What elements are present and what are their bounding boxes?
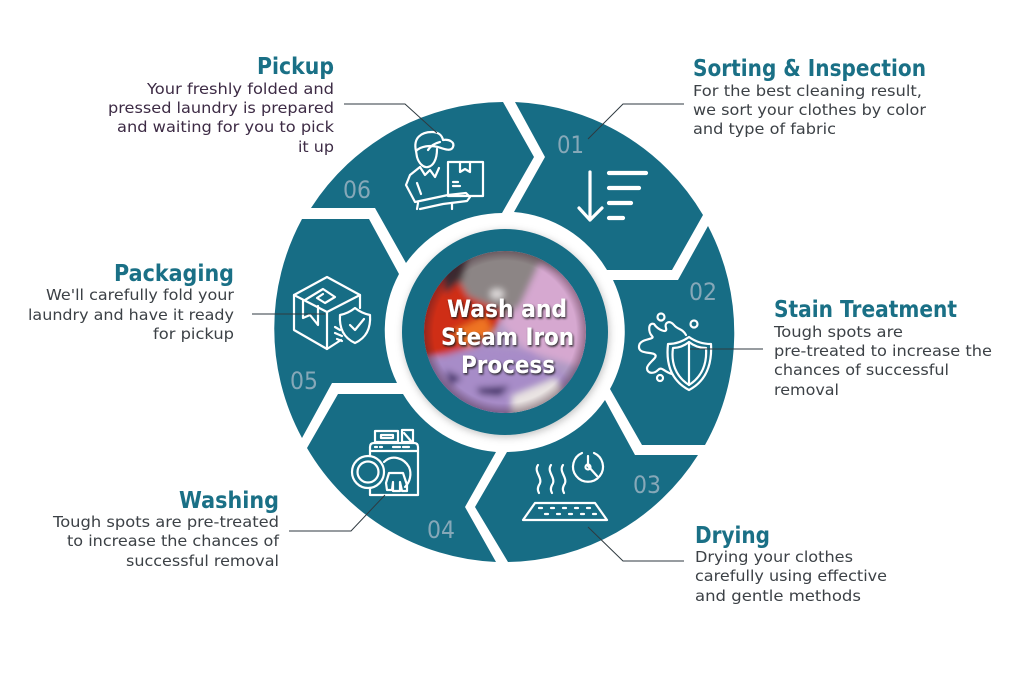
icon: sort arrow and bars bbox=[579, 172, 646, 220]
text block: pickup: Pickup bbox=[257, 54, 334, 80]
step numbers: 01 bbox=[557, 131, 584, 159]
step numbers bbox=[290, 131, 717, 544]
text block: sorting and inspection bbox=[693, 56, 927, 138]
centre teal disc bbox=[402, 229, 608, 435]
text block: pickup bbox=[108, 54, 334, 156]
leader: drying bbox=[588, 527, 684, 561]
text block: sorting and inspection: and type of fabric bbox=[693, 120, 836, 138]
text block: stain treatment: Tough spots are bbox=[773, 323, 903, 341]
step numbers: 04 bbox=[427, 516, 455, 544]
leader: washing bbox=[289, 495, 385, 531]
segment 04: washing bbox=[307, 394, 496, 562]
segment 06: pickup bbox=[311, 102, 534, 263]
text block: washing: to increase the chances of bbox=[67, 532, 280, 550]
segment 01: sorting bbox=[514, 102, 703, 270]
segment 05: packaging bbox=[274, 219, 399, 438]
icon: box with shield bbox=[294, 277, 370, 349]
text block: pickup: Your freshly folded and bbox=[146, 80, 334, 98]
text block: drying: and gentle methods bbox=[695, 587, 861, 605]
centre title: Process bbox=[461, 351, 555, 379]
centre photo bbox=[424, 251, 586, 413]
text block: stain treatment: Stain Treatment bbox=[774, 297, 957, 323]
icon: stain and shield bbox=[639, 314, 711, 390]
step numbers: 02 bbox=[689, 278, 717, 306]
leader: sorting bbox=[588, 104, 684, 139]
leader: packaging bbox=[252, 313, 325, 315]
text block: drying: Drying your clothes bbox=[695, 548, 853, 566]
text block: pickup: and waiting for you to pick bbox=[117, 118, 334, 136]
text block: packaging: laundry and have it ready bbox=[28, 306, 234, 324]
text block: stain treatment: removal bbox=[774, 381, 839, 399]
text block: drying bbox=[695, 523, 887, 605]
text block: stain treatment bbox=[773, 297, 992, 399]
leader: pickup bbox=[344, 104, 437, 133]
text block: washing: successful removal bbox=[126, 552, 279, 570]
text block: packaging: Packaging bbox=[114, 261, 234, 287]
infographic canvas bbox=[30, 56, 992, 604]
text block: drying: carefully using effective bbox=[695, 567, 887, 585]
segment 03: drying bbox=[475, 400, 698, 562]
text block: stain treatment: chances of successful bbox=[774, 361, 949, 379]
text block: stain treatment: pre-treated to increase the bbox=[774, 342, 992, 360]
text block: pickup: it up bbox=[298, 138, 334, 156]
text block: packaging bbox=[28, 261, 235, 343]
icon: washing machine bbox=[352, 430, 418, 495]
text block: packaging: We'll carefully fold your bbox=[46, 286, 235, 304]
icon: drying board, steam and clock bbox=[523, 453, 607, 520]
text block: sorting and inspection: For the best cleaning result, bbox=[693, 82, 922, 100]
text block: sorting and inspection: we sort your clothes by color bbox=[693, 101, 927, 119]
step numbers: 06 bbox=[343, 176, 371, 204]
leader: stain treatment bbox=[690, 348, 763, 350]
text block: washing: Washing bbox=[179, 488, 279, 514]
text block: packaging: for pickup bbox=[153, 325, 234, 343]
text block: washing bbox=[52, 488, 280, 570]
step numbers: 05 bbox=[290, 367, 318, 395]
segment 02: stain treatment bbox=[610, 226, 734, 445]
centre title: Wash and bbox=[447, 295, 567, 323]
text block: pickup: pressed laundry is prepared bbox=[108, 99, 334, 117]
text block: washing: Tough spots are pre-treated bbox=[52, 513, 279, 531]
step numbers: 03 bbox=[633, 471, 661, 499]
text block: drying: Drying bbox=[695, 523, 770, 549]
centre title bbox=[441, 295, 574, 379]
centre title: Steam Iron bbox=[441, 323, 574, 351]
text block: sorting and inspection: Sorting & Inspection bbox=[693, 56, 926, 82]
icon: delivery person with parcel bbox=[406, 132, 483, 209]
